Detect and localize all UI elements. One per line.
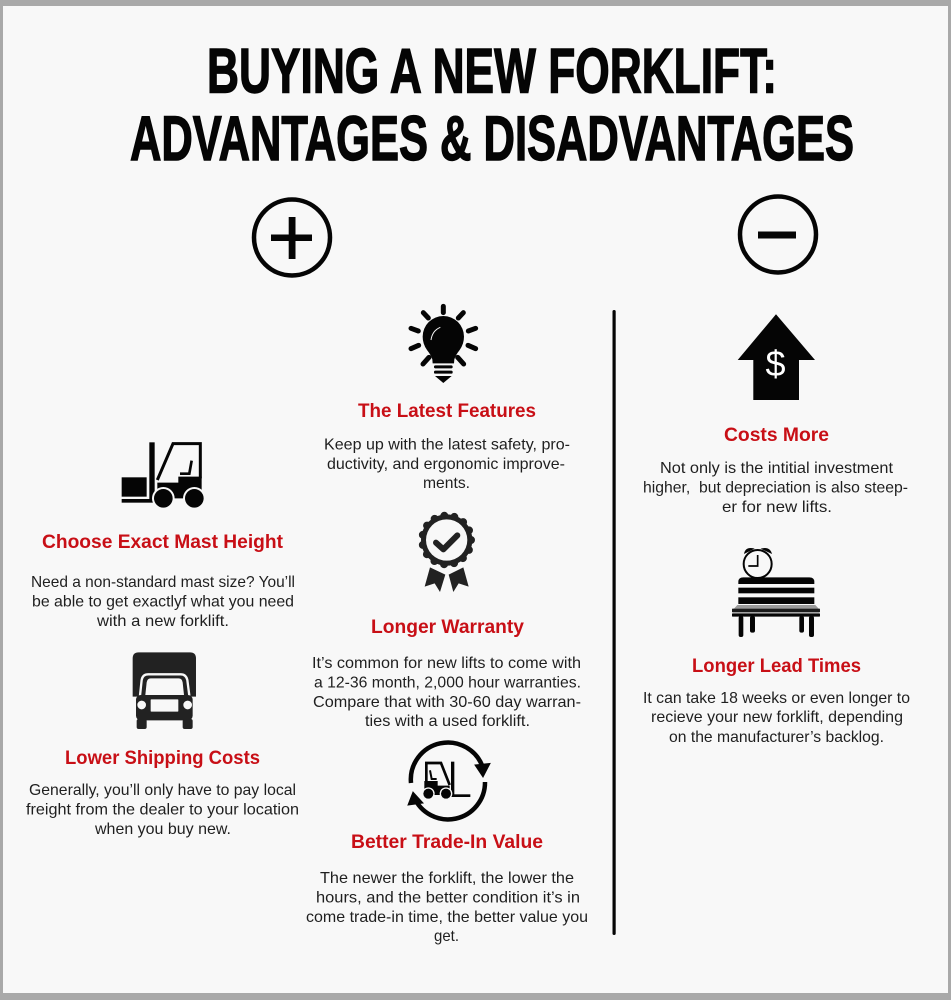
text block: when you buy new. — [94, 821, 231, 838]
text block: Generally, you’ll only have to pay local — [29, 782, 296, 799]
text block: ductivity, and ergonomic improve- — [327, 456, 565, 473]
text block: Compare that with 30-60 day warran- — [313, 694, 581, 711]
text block: higher, but depreciation is also steep- — [643, 480, 908, 496]
text block: ments. — [423, 475, 470, 492]
text block: come trade-in time, the better value you — [306, 909, 588, 926]
panel: the latest features — [324, 306, 570, 492]
icon: up arrow with dollar — [738, 314, 815, 400]
panel: lower shipping costs — [26, 652, 299, 838]
icon: bench with alarm clock — [732, 548, 820, 637]
icon: award ribbon badge — [421, 514, 472, 592]
text block — [306, 870, 588, 945]
text block: a 12-36 month, 2,000 hour warranties. — [314, 674, 581, 692]
text block — [312, 655, 581, 730]
text block: Not only is the intitial investment — [660, 460, 894, 477]
text block — [643, 690, 910, 746]
panel: better trade-in value — [306, 743, 588, 945]
icon: forklift — [122, 442, 206, 510]
text block: Need a non-standard mast size? You’ll — [31, 574, 295, 591]
text block — [324, 436, 570, 492]
text block: ties with a used forklift. — [365, 713, 530, 730]
text block: The newer the forklift, the lower the — [320, 870, 574, 887]
text block: on the manufacturer’s backlog. — [669, 729, 884, 746]
panel: longer warranty — [312, 514, 581, 730]
text block: be able to get exactlyf what you need — [32, 594, 294, 611]
text block — [31, 574, 295, 630]
heading: Longer Lead Times — [692, 656, 861, 677]
heading: Choose Exact Mast Height — [42, 532, 284, 553]
text block — [643, 460, 908, 516]
icon: up arrow with dollar: $ — [765, 343, 786, 384]
text block: It’s common for new lifts to come with — [312, 655, 581, 672]
text block: freight from the dealer to your location — [26, 802, 299, 818]
title — [130, 36, 854, 174]
icon: forklift with cycle arrows — [408, 743, 490, 819]
text block: with a new forklift. — [96, 613, 229, 630]
text block: hours, and the better condition it’s in — [316, 890, 580, 906]
text block: er for new lifts. — [722, 499, 832, 516]
column divider — [612, 310, 616, 935]
text block: get. — [434, 928, 459, 945]
heading: The Latest Features — [358, 401, 536, 422]
heading: Longer Warranty — [371, 617, 524, 638]
panel: choose exact mast height — [31, 442, 295, 630]
text block: It can take 18 weeks or even longer to — [643, 690, 910, 707]
text block: recieve your new forklift, depending — [651, 709, 903, 726]
icon: plus in circle — [254, 200, 330, 276]
panel: costs more — [643, 314, 908, 516]
text block: Keep up with the latest safety, pro- — [324, 436, 570, 453]
panel: longer lead times — [643, 548, 910, 746]
icon: minus in circle — [740, 196, 816, 272]
text block — [26, 782, 299, 838]
icon: truck — [133, 652, 196, 729]
heading: Better Trade-In Value — [351, 832, 543, 853]
heading: Lower Shipping Costs — [65, 748, 260, 769]
icon: light bulb — [411, 306, 476, 383]
heading: Costs More — [724, 425, 829, 446]
